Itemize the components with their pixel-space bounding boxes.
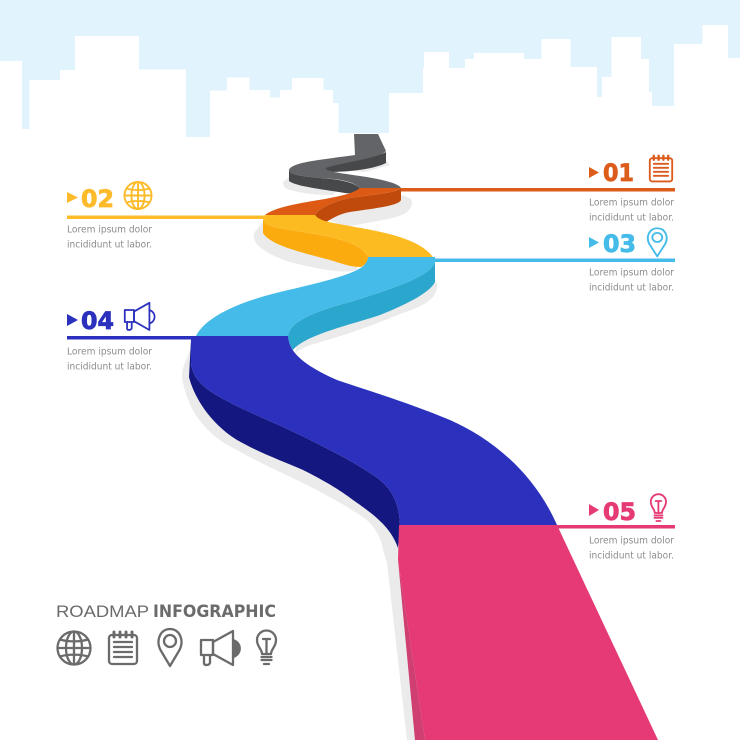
text 04: incididunt ut labor.: [67, 362, 152, 372]
icon: light bulb: [257, 630, 276, 664]
road segment 04: deep blue: [189, 336, 557, 548]
icon: light bulb: [651, 494, 666, 521]
icon: notepad: [650, 156, 672, 181]
number 02: 02: [81, 185, 114, 213]
icon: megaphone: [201, 631, 240, 665]
icon: notepad: [109, 632, 137, 664]
road segment: grey: [289, 134, 401, 193]
number 05: 05: [603, 498, 636, 526]
text 02: incididunt ut labor.: [67, 240, 152, 250]
text 04: Lorem ipsum dolor: [67, 346, 152, 358]
road: winding 3D path: [182, 134, 658, 740]
marker 05: [589, 504, 599, 516]
number 01: 01: [603, 159, 634, 187]
callout 05: [557, 494, 675, 562]
icon: map pin: [648, 228, 667, 256]
text 03: incididunt ut labor.: [589, 282, 674, 294]
icon row: [58, 629, 276, 666]
marker 03: [589, 237, 599, 248]
text 05: incididunt ut labor.: [589, 550, 674, 562]
callout 04: [67, 303, 192, 372]
number 04: 04: [81, 307, 114, 335]
callout 02: [67, 182, 265, 250]
callout 03: [433, 228, 675, 294]
text 01: incididunt ut labor.: [589, 212, 674, 224]
skyline background: [0, 0, 740, 137]
callout 01: [401, 156, 675, 224]
icon: megaphone: [125, 303, 155, 330]
title: ROADMAP: [56, 603, 149, 621]
icon: map pin: [159, 629, 181, 666]
marker 01: [589, 167, 599, 178]
text 01: Lorem ipsum dolor: [589, 198, 674, 208]
road segment 05: pink: [398, 525, 658, 740]
ground shadows: [182, 160, 437, 740]
text 05: Lorem ipsum dolor: [589, 536, 674, 546]
text 02: Lorem ipsum dolor: [67, 224, 152, 236]
title: INFOGRAPHIC: [153, 602, 276, 621]
marker 02: [67, 192, 78, 203]
road segment 03: light blue: [196, 257, 435, 350]
road segment 01: orange: [265, 188, 401, 222]
road segment 02: yellow: [263, 215, 433, 267]
marker 04: [67, 314, 78, 326]
number 03: 03: [603, 230, 636, 258]
text 03: Lorem ipsum dolor: [589, 268, 674, 278]
icon: globe: [58, 632, 90, 664]
icon: globe: [124, 182, 152, 209]
